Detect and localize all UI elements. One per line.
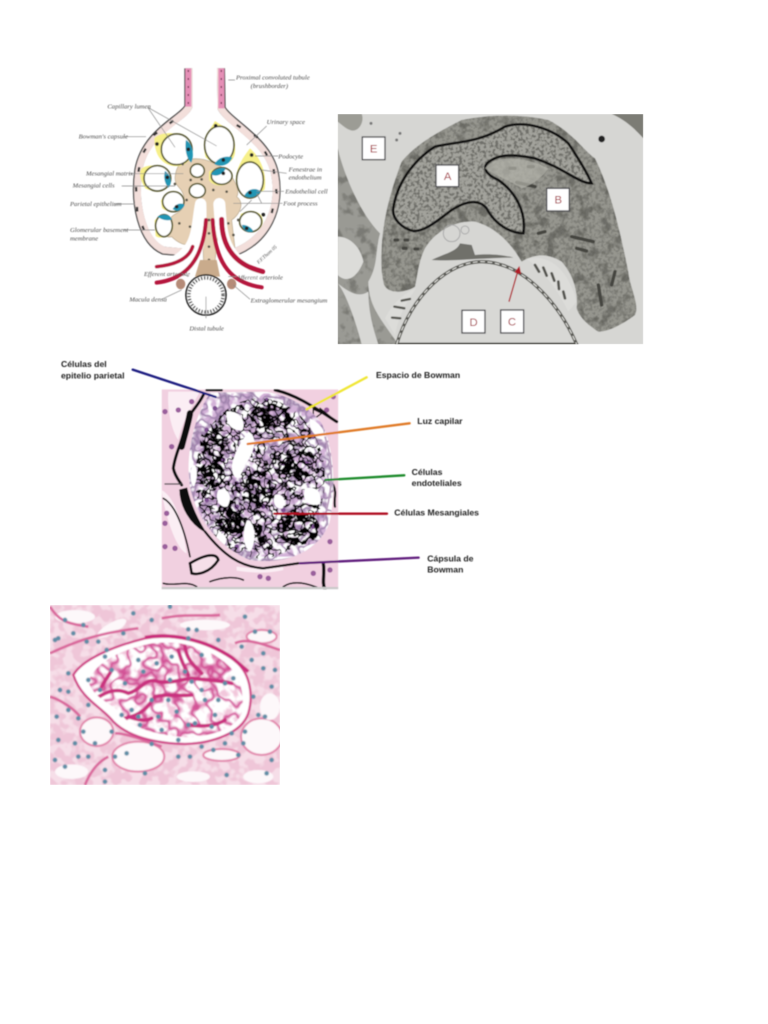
label text [61, 359, 479, 575]
pale rim [270, 437, 331, 561]
arrow [509, 266, 521, 302]
label text: Células [412, 467, 443, 477]
tubule outlines [163, 390, 337, 589]
diagram labels: Capillary lumen [107, 103, 151, 110]
macula densa and extraglomerular mesangium [176, 260, 236, 289]
diagram labels: Fenestrae in [288, 166, 323, 173]
diagram labels: membrane [70, 236, 98, 243]
diagram labels: Distal tubule [188, 326, 224, 333]
foot processes [527, 258, 577, 312]
mesangium central tissue [165, 159, 241, 270]
diagram labels: Efferent arteriole [143, 271, 190, 278]
cytoplasm organelles [395, 167, 615, 305]
diagram labels: Urinary space [267, 119, 305, 126]
diagram labels: Mesangial cells [72, 183, 115, 190]
lilac mesangial patches [193, 393, 327, 557]
nuclei [207, 400, 313, 547]
diagram labels: F.F.Thom 05 [256, 245, 279, 266]
diagram labels: Afferent arteriole [236, 274, 283, 281]
letter labels [370, 144, 562, 329]
diagram labels: Endothelial cell [284, 189, 328, 196]
pink capillary walls [85, 640, 248, 740]
capillary tuft [85, 640, 248, 740]
urinary space debris [432, 243, 513, 260]
black reticulin strands dense clusters [198, 403, 320, 550]
letter labels: C [508, 317, 516, 329]
diagram labels [69, 74, 328, 333]
diagram labels: Podocyte [277, 153, 303, 160]
diagram labels: (brushborder) [251, 83, 289, 90]
white capillary lumens [191, 411, 324, 556]
label text: Espacio de Bowman [376, 370, 460, 380]
diagram labels: Macula densa [128, 297, 168, 304]
nucleus [393, 124, 592, 233]
neighbouring cell left [338, 148, 398, 344]
black reticulin strands wide layer [195, 398, 325, 558]
capillary loops [144, 126, 263, 237]
pale tubule gaps [162, 392, 283, 573]
label text: endoteliales [412, 478, 462, 488]
glomerular tuft [188, 391, 334, 562]
label lines [133, 370, 419, 563]
label text: Bowman [427, 565, 463, 575]
diagram labels: Mesangial matrix [85, 170, 133, 177]
glomerulus capsule [73, 637, 251, 744]
podocyte nuclei [157, 126, 263, 228]
diagram labels: Extraglomerular mesangium [250, 297, 328, 304]
panel: renal corpuscle diagram [69, 68, 328, 333]
leader lines [114, 80, 287, 299]
label text: Células del [61, 359, 107, 369]
diagram labels: Glomerular basement [70, 227, 128, 234]
podocyte yellow cytoplasm [140, 121, 265, 238]
mesangial nuclei [175, 164, 238, 268]
cell body [381, 116, 636, 332]
letter labels: E [370, 144, 378, 156]
letter labels: B [555, 195, 562, 207]
cytoplasm texture [381, 116, 636, 332]
panel: electron micrograph [338, 114, 643, 344]
micrograph [162, 389, 340, 589]
diagram labels: Bowman's capsule [79, 134, 128, 141]
lilac capillary walls [183, 390, 337, 567]
panel: PAS stained glomerulus photo [50, 605, 282, 785]
distal tubule [186, 275, 226, 318]
afferent and efferent arterioles [157, 204, 263, 287]
letter label boxes [362, 137, 569, 333]
diagram labels: Foot process [282, 200, 318, 207]
endothelial cells blue [158, 140, 261, 232]
label text: Luz capilar [417, 416, 463, 426]
letter labels: D [470, 317, 478, 329]
label text: epitelio parietal [61, 371, 124, 381]
panel: silver stained glomerulus with labels [61, 359, 479, 589]
label text: Cápsula de [427, 554, 474, 564]
letter labels: A [444, 171, 452, 183]
bowman capsule wall [136, 68, 277, 254]
diagram labels: Proximal convoluted tubule [235, 74, 310, 81]
diagram labels: Parietal epithelium [69, 201, 122, 208]
tubule cells nuclei [165, 397, 333, 578]
diagram labels: endothelium [289, 174, 322, 181]
nuclei [55, 607, 275, 782]
capillary lumen and basement membrane [397, 262, 577, 344]
label text: Células Mesangiales [394, 508, 479, 518]
surrounding tubule lumens [55, 610, 282, 783]
mottled tuft background [93, 642, 242, 738]
thick magenta walls [97, 647, 232, 726]
